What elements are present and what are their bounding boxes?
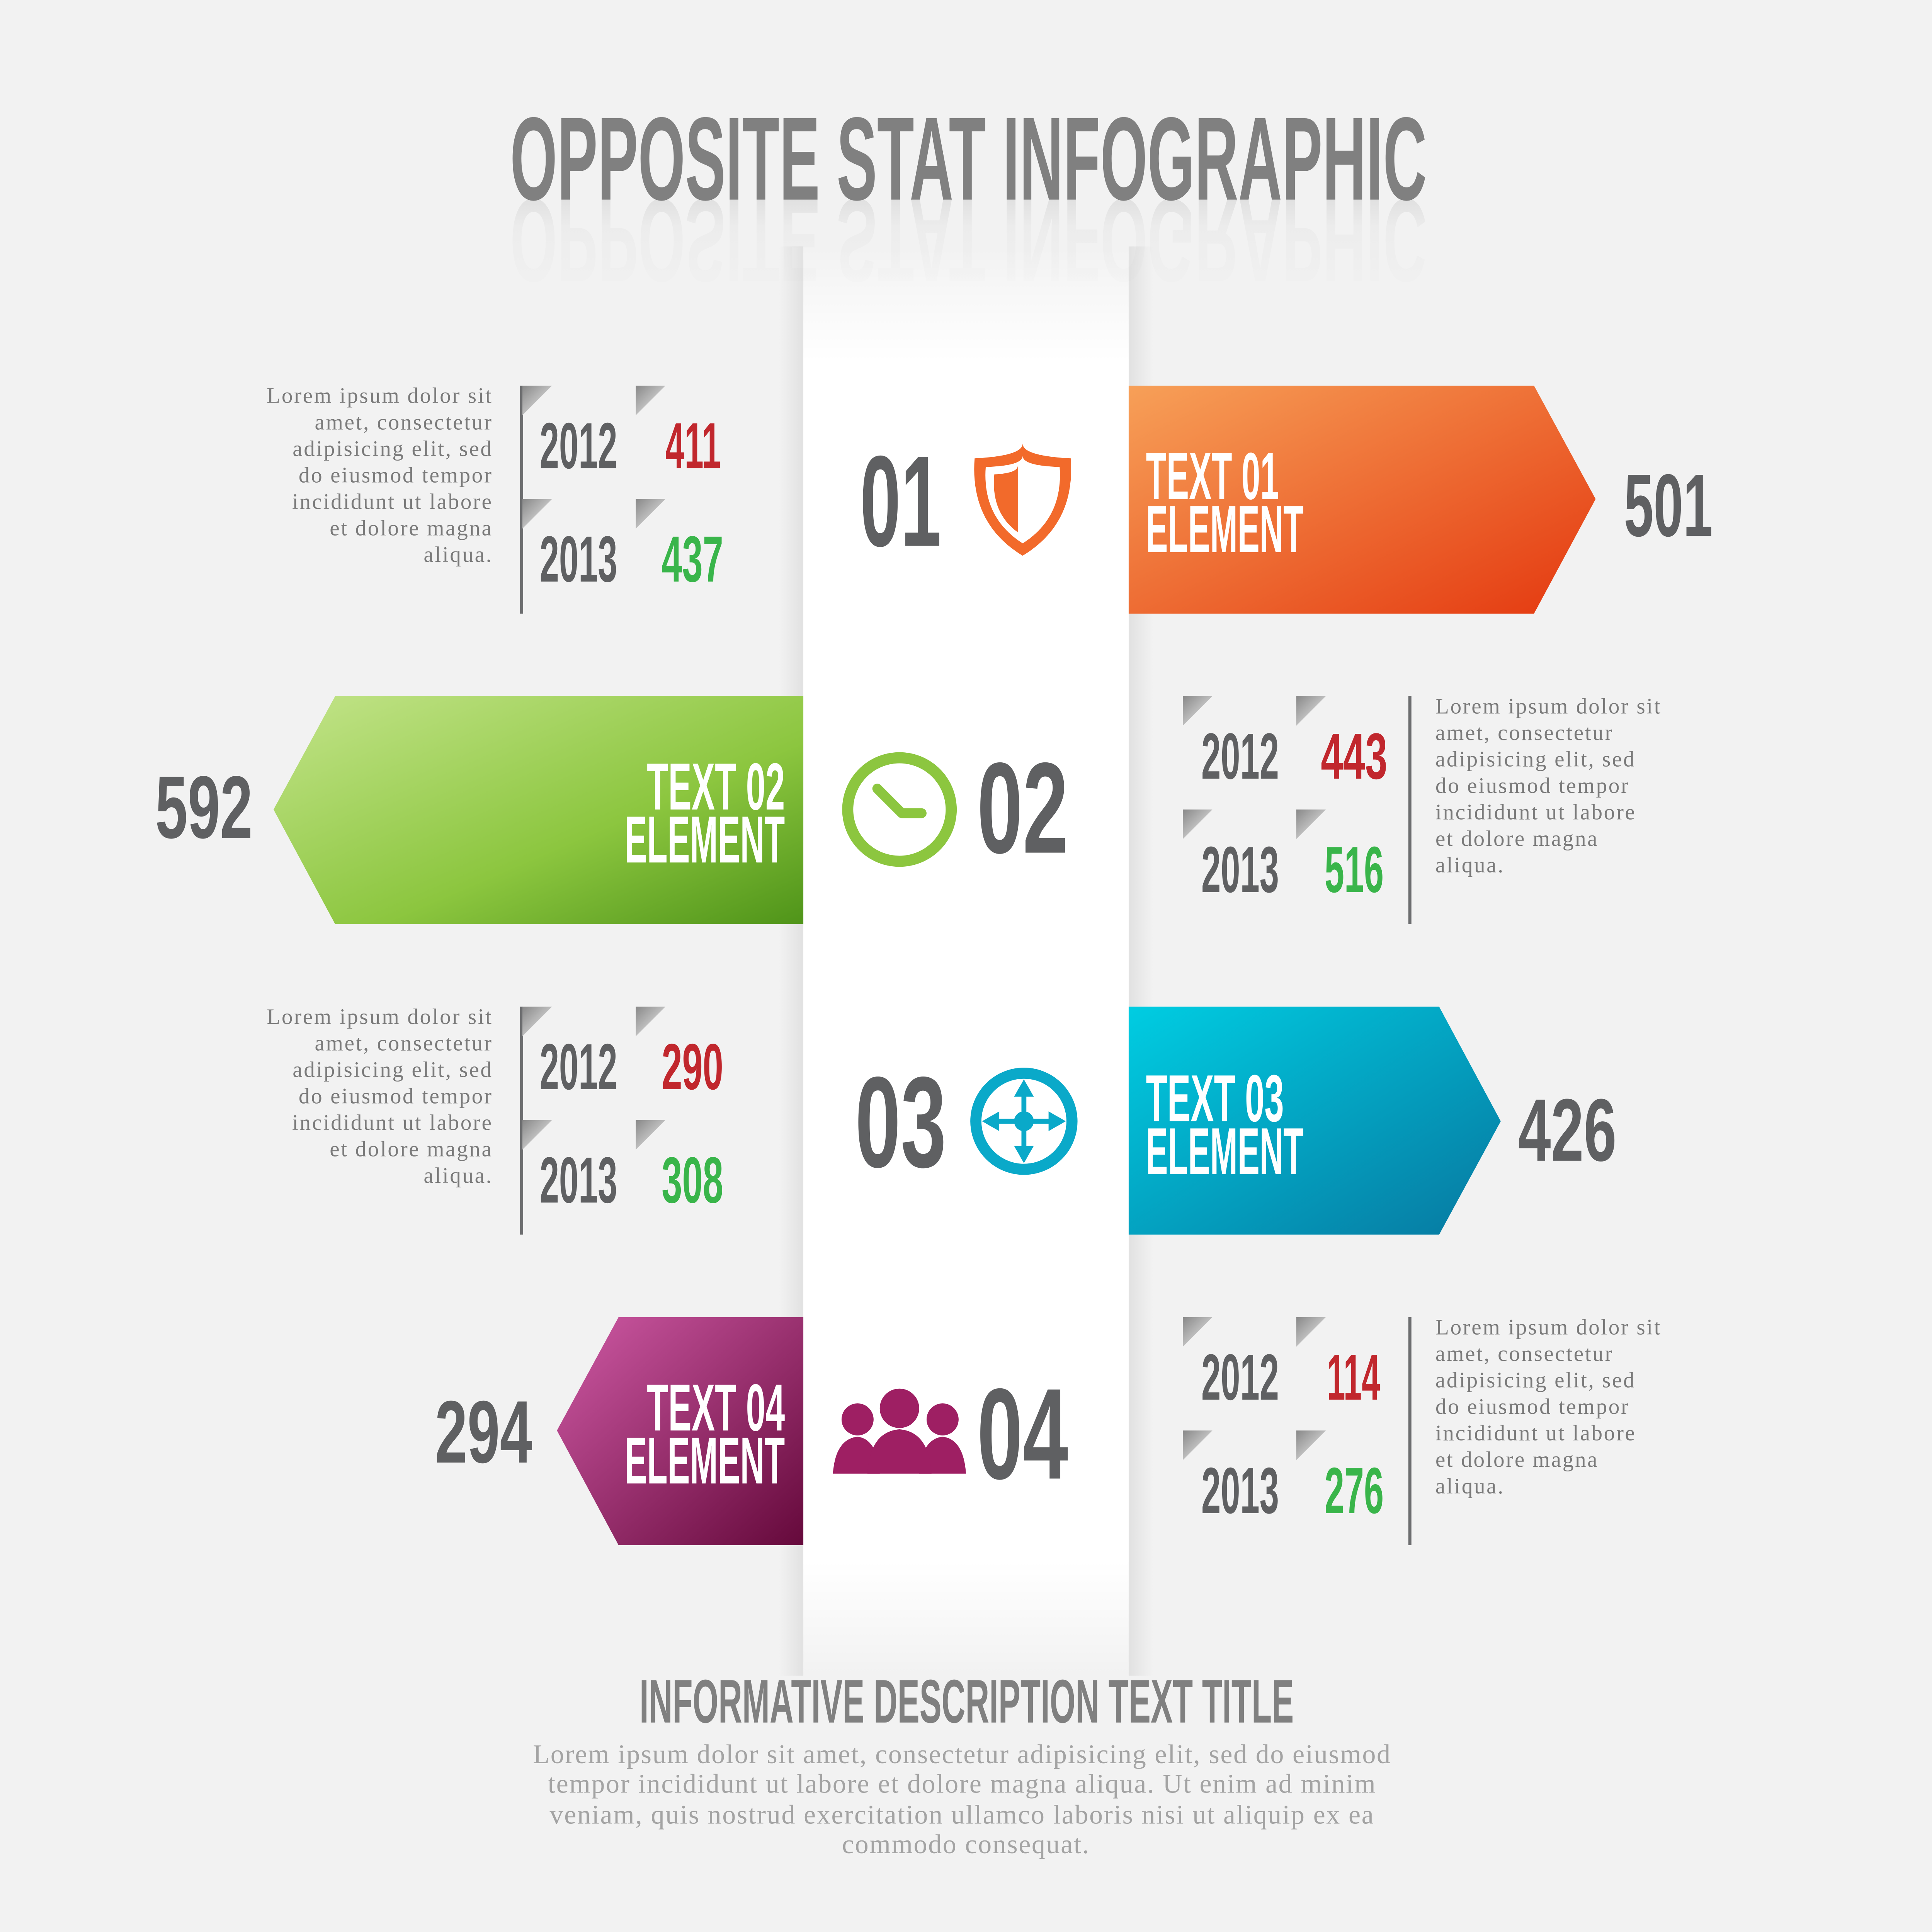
bottom title: INFORMATIVE DESCRIPTION TEXT TITLE	[639, 1667, 1294, 1736]
stats row 1: adipisicing elit, sed	[293, 437, 493, 461]
bottom paragraph: commodo consequat.	[842, 1829, 1090, 1859]
row 3: blue arrow: ELEMENT	[1146, 1114, 1304, 1189]
value 592: 592	[155, 757, 253, 857]
stats row 2: et dolore magna	[1435, 827, 1599, 851]
stats row 2: amet, consectetur	[1435, 721, 1614, 745]
bottom paragraph: tempor incididunt ut labore et dolore magna aliqua. Ut enim ad minim	[548, 1769, 1376, 1799]
bottom paragraph: Lorem ipsum dolor sit amet, consectetur adipisicing elit, sed do eiusmod	[533, 1739, 1391, 1769]
stats row 4: 114	[1327, 1340, 1380, 1413]
number 03: 03	[855, 1050, 946, 1194]
stats row 2: adipisicing elit, sed	[1435, 747, 1636, 771]
stats row 3: incididunt ut labore	[292, 1111, 493, 1135]
stats row 2: aliqua.	[1435, 853, 1505, 878]
stats row 3: 308	[662, 1143, 723, 1216]
stats row 1	[267, 384, 723, 614]
stats row 2: do eiusmod tempor	[1435, 774, 1630, 798]
stats row 4: 2012	[1201, 1340, 1279, 1413]
stats row 3: et dolore magna	[330, 1137, 493, 1162]
stats row 1: do eiusmod tempor	[299, 463, 493, 487]
stats row 2: 2012	[1201, 719, 1279, 793]
stats row 3: 290	[662, 1030, 723, 1103]
stats row 3: 2012	[540, 1030, 617, 1103]
stats row 3: 2013	[540, 1143, 617, 1216]
stats row 2: 443	[1321, 719, 1388, 793]
row 4: magenta arrow: ELEMENT	[625, 1423, 785, 1498]
row 1: orange arrow: ELEMENT	[1146, 492, 1304, 566]
stats row 2: 2013	[1201, 833, 1279, 906]
stats row 1: aliqua.	[423, 543, 493, 567]
stats row 2: incididunt ut labore	[1435, 800, 1636, 825]
stats row 3: aliqua.	[423, 1163, 493, 1188]
stats row 1: 2012	[540, 409, 617, 482]
value 294: 294	[435, 1382, 532, 1481]
icon: clock	[848, 758, 951, 861]
number 04: 04	[977, 1362, 1069, 1506]
row 4: magenta arrow	[557, 1317, 803, 1545]
stats row 4: adipisicing elit, sed	[1435, 1368, 1636, 1393]
value 501: 501	[1624, 456, 1713, 555]
stats row 1: 437	[662, 522, 723, 595]
stats row 4	[1183, 1315, 1662, 1545]
stats row 1: et dolore magna	[330, 516, 493, 541]
stats row 2: 516	[1325, 833, 1384, 906]
row 2: green arrow: ELEMENT	[625, 803, 785, 877]
stats row 4: aliqua.	[1435, 1474, 1505, 1498]
row 3: blue arrow	[1129, 1007, 1501, 1235]
row 3: blue arrow: TEXT 03	[1146, 1061, 1284, 1136]
number 02: 02	[977, 736, 1068, 880]
stats row 4: do eiusmod tempor	[1435, 1395, 1630, 1419]
stats row 4: amet, consectetur	[1435, 1342, 1614, 1366]
row 2: green arrow	[274, 696, 803, 924]
row 1: orange arrow: TEXT 01	[1146, 439, 1279, 513]
icon: shield	[974, 444, 1071, 556]
stats row 3: amet, consectetur	[315, 1031, 493, 1055]
row 4: magenta arrow: TEXT 04	[647, 1371, 785, 1445]
icon: people	[833, 1389, 966, 1474]
stats row 4: 2013	[1201, 1454, 1279, 1527]
stats row 1: 411	[665, 409, 721, 482]
stats row 2	[1183, 694, 1662, 924]
stats row 4: Lorem ipsum dolor sit	[1435, 1315, 1662, 1339]
icon: compass	[976, 1073, 1072, 1169]
stats row 1: amet, consectetur	[315, 410, 493, 434]
stats row 1: incididunt ut labore	[292, 490, 493, 514]
stats row 2: Lorem ipsum dolor sit	[1435, 694, 1662, 718]
stats row 1: 2013	[540, 522, 617, 595]
stats row 3: do eiusmod tempor	[299, 1084, 493, 1109]
row 2: green arrow: TEXT 02	[647, 750, 785, 824]
stats row 3: Lorem ipsum dolor sit	[267, 1005, 493, 1029]
value 426: 426	[1518, 1080, 1617, 1180]
stats row 4: 276	[1325, 1454, 1384, 1527]
stats row 1: Lorem ipsum dolor sit	[267, 384, 493, 408]
stats row 4: et dolore magna	[1435, 1447, 1599, 1472]
number 01: 01	[860, 429, 941, 573]
central strip	[779, 247, 1153, 1676]
stats row 3	[267, 1005, 723, 1235]
row 1: orange arrow	[1129, 386, 1595, 614]
stats row 3: adipisicing elit, sed	[293, 1058, 493, 1082]
bottom paragraph: veniam, quis nostrud exercitation ullamco laboris nisi ut aliquip ex ea	[550, 1799, 1374, 1830]
stats row 4: incididunt ut labore	[1435, 1421, 1636, 1446]
title	[510, 93, 1427, 307]
